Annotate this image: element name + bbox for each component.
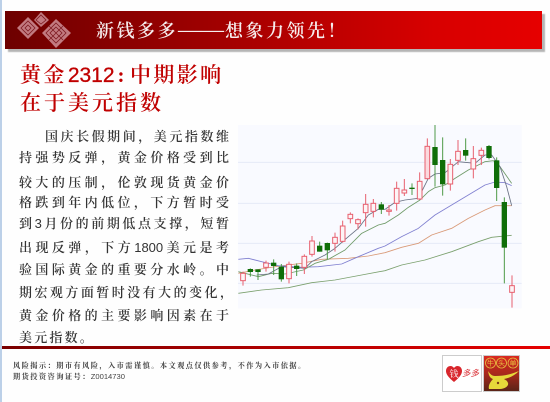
rising candles <box>241 138 514 308</box>
body text: 较大的压制，伦敦现货黄金价 <box>19 175 229 190</box>
logo wordmark: 多多 <box>462 367 479 379</box>
body text: 美元指数。 <box>19 330 95 345</box>
main heading: 黄金2312:中期影响 <box>20 63 224 87</box>
logo: 牛头单: 头 <box>498 358 505 368</box>
risk disclaimer <box>13 361 307 381</box>
moving averages <box>238 155 512 293</box>
header banner <box>5 11 542 49</box>
falling candles <box>248 125 507 283</box>
logo: 牛头单 <box>483 355 520 392</box>
footer divider bar <box>2 346 550 349</box>
body text: 格跌到年内低位，下方暂时受 <box>19 195 229 210</box>
icon: diamond ornament <box>17 12 71 48</box>
body text: 到3月份的前期低点支撑，短暂 <box>19 216 229 231</box>
banner title: 新钱多多 想象力领先！ <box>96 21 348 41</box>
body text: 验国际黄金的重要分水岭。中 <box>19 262 229 277</box>
body text <box>19 129 233 345</box>
logo: 钱多多 <box>442 355 482 392</box>
banner title: —— <box>178 17 224 42</box>
body text: 出现反弹，下方1800美元是考 <box>19 240 229 255</box>
icon: heart: 钱 <box>449 367 459 380</box>
body text: 黄金价格的主要影响因素在于 <box>19 308 229 323</box>
main heading <box>20 63 224 115</box>
candlestick chart <box>238 125 522 308</box>
main heading: 在于美元指数 <box>20 91 164 115</box>
logo: 牛头单: 牛 <box>487 358 494 368</box>
body text: 期宏观方面暂时没有大的变化， <box>19 285 233 300</box>
body text: 国庆长假期间，美元指数维 <box>45 129 229 144</box>
body text: 持强势反弹，黄金价格受到比 <box>19 150 229 165</box>
icon: heart <box>446 366 462 382</box>
risk disclaimer: 期货投资咨询证号：Z0014730 <box>13 372 125 381</box>
risk disclaimer: 风险揭示：期市有风险，入市需谨慎。本文观点仅供参考，不作为入市依据。 <box>13 362 307 370</box>
logo: 牛头单: 单 <box>510 358 516 368</box>
